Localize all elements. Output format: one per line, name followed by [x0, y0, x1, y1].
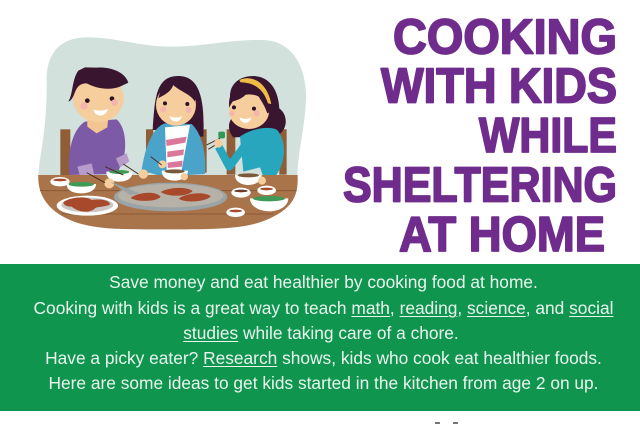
green intro band — [0, 264, 640, 411]
chair backs — [60, 129, 287, 176]
title line: WHILE: WHILE — [479, 109, 617, 163]
girl in teal top with headband — [207, 76, 286, 180]
intro line 2: Cooking with kids is a great way to teach math, reading, science, and social — [34, 298, 613, 318]
illustration backdrop blob — [38, 37, 306, 177]
table plank lines — [40, 191, 297, 214]
grill plate with meat — [114, 183, 227, 211]
plate of meat — [57, 196, 118, 216]
hands and chopsticks — [87, 139, 266, 195]
title — [343, 10, 617, 262]
footer fragment: cropped icon tops — [435, 422, 458, 424]
boy — [68, 67, 129, 176]
table — [38, 175, 298, 229]
illustration: three kids eating at a table — [38, 37, 306, 229]
title line: WITH KIDS: WITH KIDS — [381, 60, 617, 114]
title line: COOKING: COOKING — [393, 10, 617, 64]
intro line 4: Have a picky eater? Research shows, kids who cook eat healthier foods. — [45, 348, 602, 368]
bowls and dishes — [50, 169, 288, 217]
intro line 1: Save money and eat healthier by cooking food at home. — [109, 272, 538, 292]
title line: AT HOME: AT HOME — [399, 208, 605, 262]
girl in blue cardigan — [142, 76, 205, 177]
intro line 3: studies while taking care of a chore. — [183, 323, 459, 343]
intro line 5: Here are some ideas to get kids started in the kitchen from age 2 on up. — [48, 373, 598, 393]
